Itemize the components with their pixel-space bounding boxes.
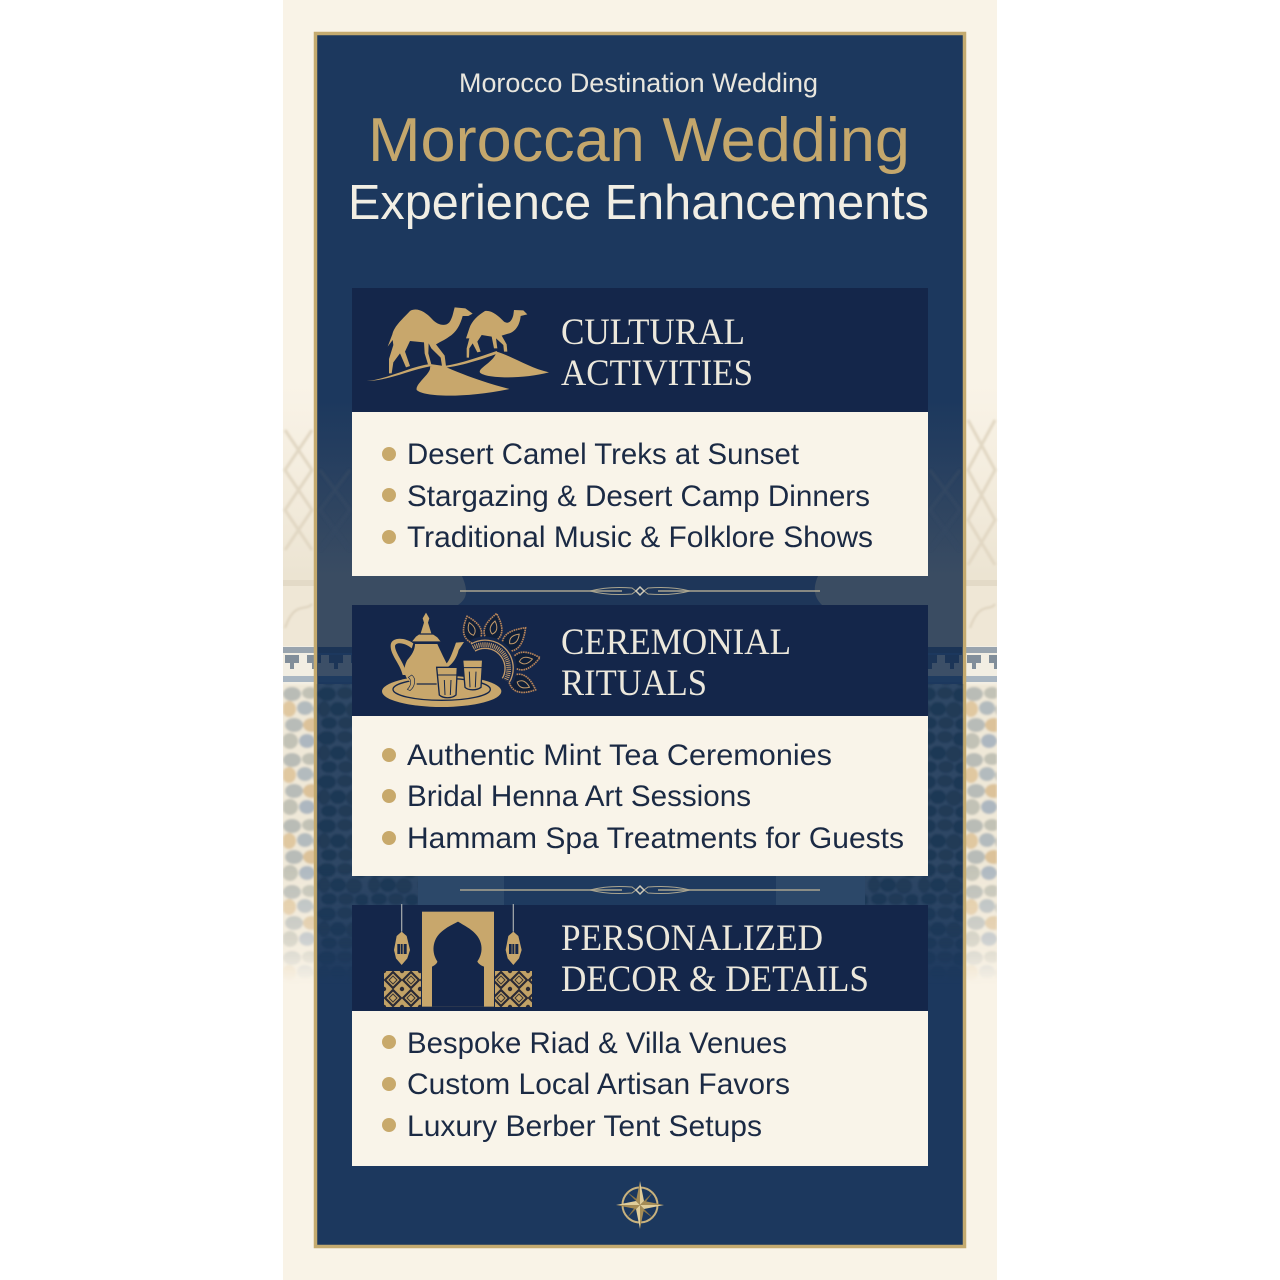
heading: cultural activities: ACTIVITIES bbox=[561, 353, 753, 394]
panel: ceremonial rituals bbox=[352, 605, 928, 876]
body: personalized decor list: Custom Local Artisan Favors bbox=[407, 1068, 790, 1101]
icon: camels on dunes bbox=[367, 307, 549, 396]
panel: cultural activities bbox=[352, 288, 928, 576]
heading: ceremonial rituals: CEREMONIAL bbox=[561, 622, 791, 663]
header band: ceremonial rituals bbox=[352, 605, 928, 716]
cream background page bbox=[283, 0, 997, 1280]
icon: arch, lanterns and tiles bbox=[384, 904, 532, 1007]
title bbox=[348, 106, 929, 230]
navy centre between panels one and two bbox=[458, 576, 822, 605]
heading: personalized decor: DECOR & DETAILS bbox=[561, 959, 869, 1000]
lantern right bbox=[506, 904, 522, 965]
body: personalized decor list: Luxury Berber Tent Setups bbox=[407, 1110, 762, 1143]
lantern left bbox=[394, 904, 410, 965]
body: personalized decor list bbox=[352, 1011, 928, 1166]
mandala bbox=[459, 612, 542, 698]
heading: cultural activities bbox=[561, 312, 753, 394]
header band: cultural activities bbox=[352, 288, 928, 412]
body: ceremonial rituals list bbox=[352, 716, 928, 876]
panel: personalized decor and details bbox=[352, 904, 928, 1166]
body: cultural activities list: Traditional Music & Folklore Shows bbox=[407, 521, 873, 554]
icon: compass rose bbox=[616, 1181, 664, 1229]
tile left bbox=[384, 971, 421, 1007]
heading: personalized decor bbox=[561, 918, 869, 1000]
tray bbox=[382, 676, 501, 707]
teapot bbox=[391, 613, 464, 691]
tea glass right bbox=[463, 660, 483, 690]
heading: personalized decor: PERSONALIZED bbox=[561, 918, 823, 959]
body: ceremonial rituals list: Authentic Mint Tea Ceremonies bbox=[407, 739, 832, 772]
body: personalized decor list: Bespoke Riad & Villa Venues bbox=[407, 1027, 787, 1060]
heading: cultural activities: CULTURAL bbox=[561, 312, 745, 353]
header band: personalized decor bbox=[352, 905, 928, 1011]
body: cultural activities list: Stargazing & Desert Camp Dinners bbox=[407, 480, 870, 513]
gold framed navy panel bbox=[316, 34, 964, 1246]
icon: tea set and mandala bbox=[382, 612, 542, 707]
infographic canvas bbox=[282, 0, 998, 1280]
subtitle: Morocco Destination Wedding bbox=[459, 68, 818, 98]
tile right bbox=[495, 971, 532, 1007]
body: cultural activities list: Desert Camel Treks at Sunset bbox=[407, 438, 800, 471]
arch bbox=[422, 912, 494, 1007]
body: cultural activities list bbox=[352, 412, 928, 576]
body: ceremonial rituals list: Hammam Spa Treatments for Guests bbox=[407, 822, 904, 855]
title: Experience Enhancements bbox=[348, 176, 929, 230]
body: ceremonial rituals list: Bridal Henna Art Sessions bbox=[407, 780, 751, 813]
navy centre between panels two and three bbox=[418, 876, 865, 905]
title: Moroccan Wedding bbox=[368, 106, 910, 175]
divider ornament one bbox=[460, 587, 820, 595]
tea glass left bbox=[437, 667, 457, 698]
heading: ceremonial rituals: RITUALS bbox=[561, 663, 707, 704]
heading: ceremonial rituals bbox=[561, 622, 791, 704]
divider ornament two bbox=[460, 886, 820, 894]
